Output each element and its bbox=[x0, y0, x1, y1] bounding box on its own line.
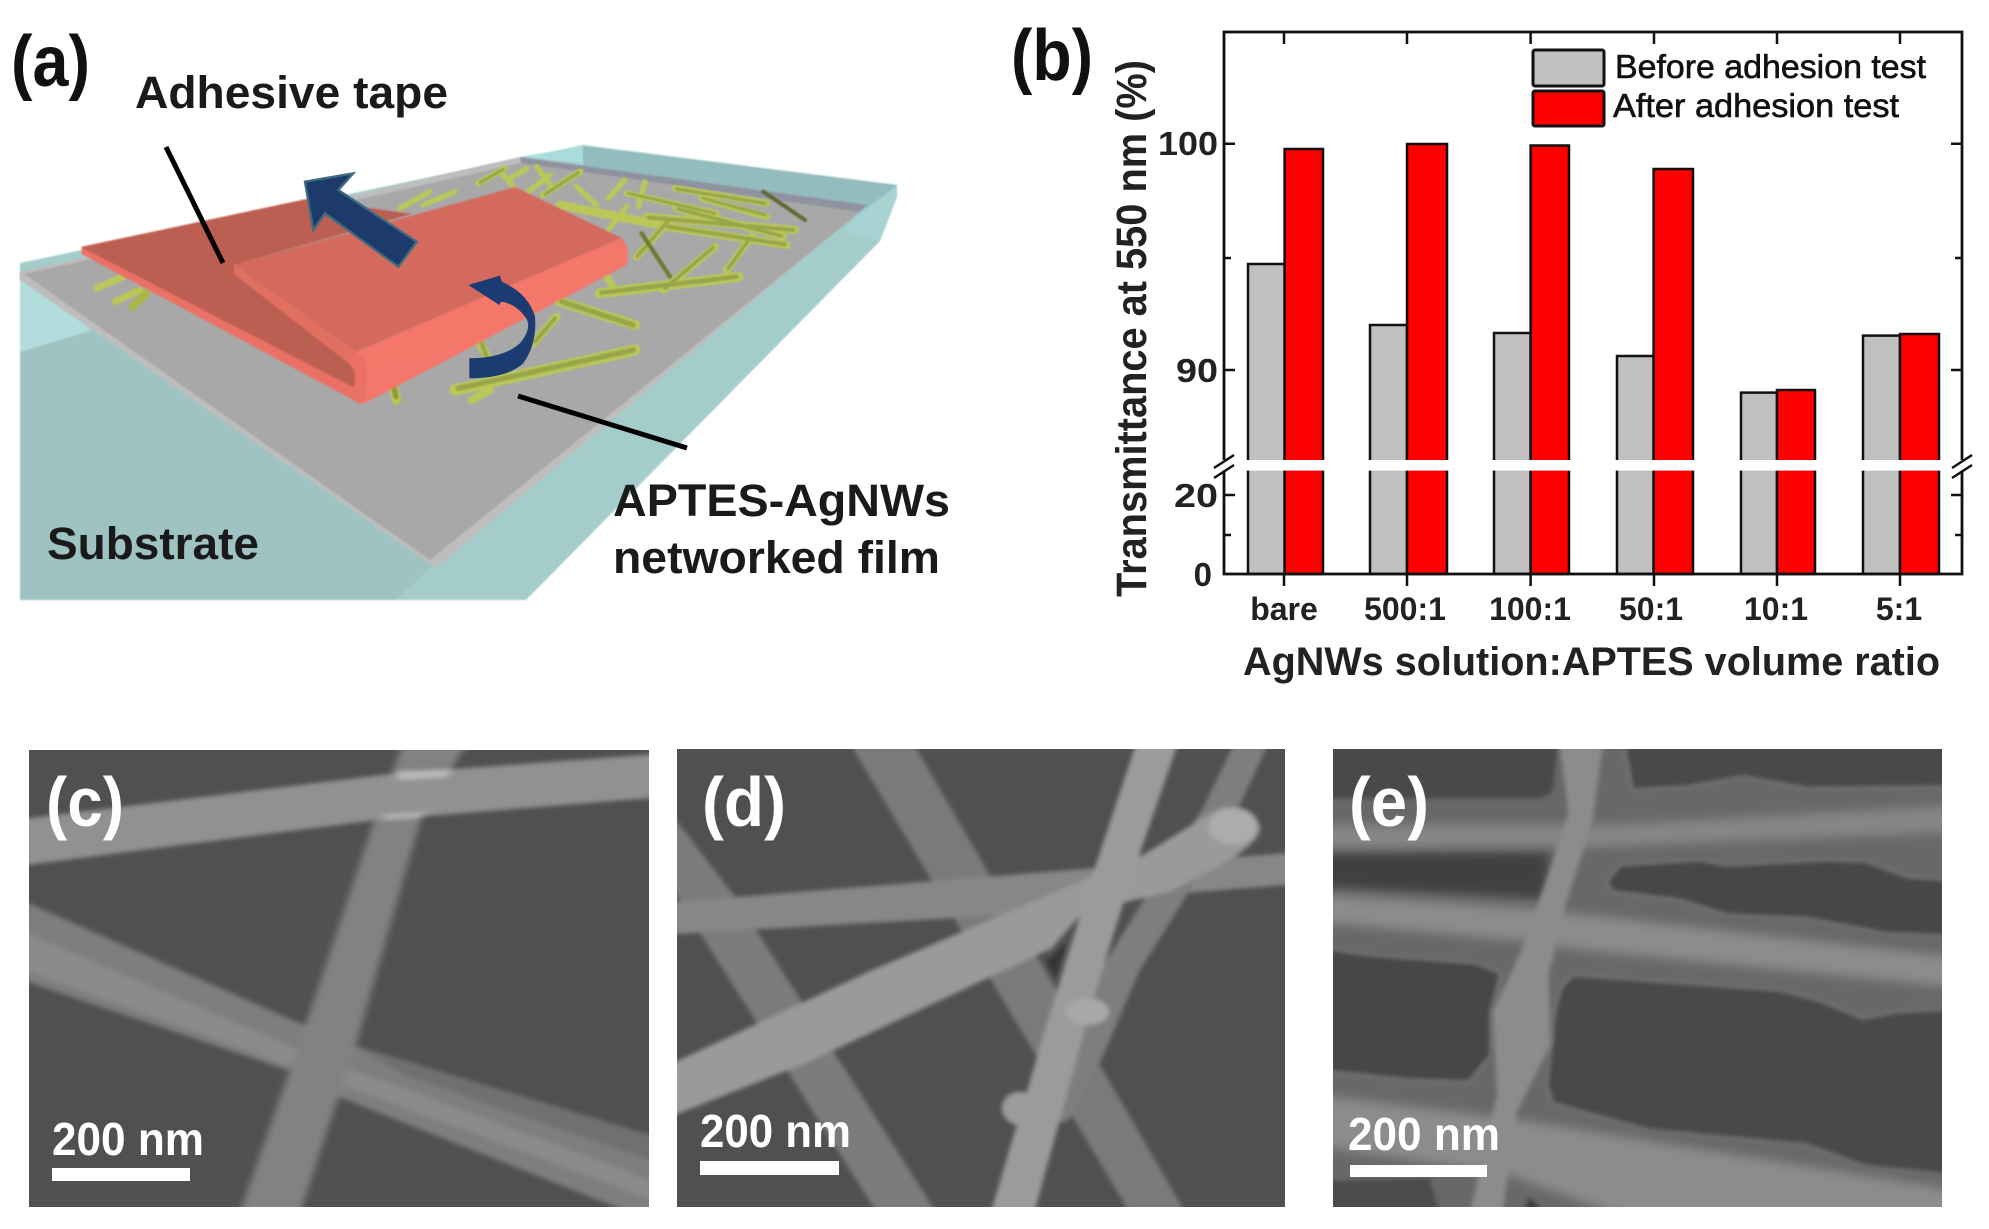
legend bbox=[1533, 48, 1926, 126]
scale label c: 200 nm bbox=[52, 1113, 204, 1165]
y tick labels: 0 bbox=[1194, 556, 1212, 593]
x tick labels: 10:1 bbox=[1744, 591, 1808, 627]
bars 5:1 bbox=[1863, 334, 1939, 574]
tape bbox=[82, 187, 628, 404]
legend: Before adhesion test bbox=[1615, 48, 1926, 85]
vertical nanowire e bbox=[1467, 735, 1604, 1225]
leader line: film bbox=[518, 396, 687, 448]
label (b): (b) bbox=[1011, 16, 1093, 96]
label (e): (e) bbox=[1349, 763, 1429, 841]
axes frame bbox=[1224, 32, 1962, 574]
panel d: SEM image bbox=[677, 749, 1285, 1207]
panel e: SEM image bbox=[1333, 749, 1942, 1207]
substrate slab bbox=[20, 145, 897, 600]
label film: APTES-AgNWs bbox=[613, 475, 950, 526]
y tick labels bbox=[1158, 125, 1218, 593]
tick marks bbox=[1224, 32, 1962, 586]
y axis title: Transmittance at 550 nm (%) bbox=[1108, 60, 1156, 597]
y tick labels: 90 bbox=[1176, 352, 1218, 389]
scale bar d bbox=[700, 1161, 839, 1175]
x tick labels: 500:1 bbox=[1364, 591, 1446, 627]
x tick labels: 50:1 bbox=[1619, 591, 1683, 627]
label (a): (a) bbox=[11, 22, 90, 102]
x axis title: AgNWs solution:APTES volume ratio bbox=[1243, 640, 1940, 684]
x tick labels bbox=[1250, 591, 1922, 627]
bars 100:1 bbox=[1494, 146, 1569, 574]
panel b: transmittance bar chart bbox=[1011, 16, 1974, 684]
label film: networked film bbox=[613, 532, 940, 583]
arrow: peel direction straight bbox=[305, 173, 417, 267]
axis break band bbox=[1212, 455, 1974, 478]
nanowires c bbox=[29, 750, 649, 1207]
scale label e: 200 nm bbox=[1348, 1108, 1500, 1160]
nanowires d bbox=[677, 749, 1285, 1207]
arrow: peel direction curved bbox=[468, 276, 535, 378]
bars bare bbox=[1248, 149, 1323, 574]
scale bar e bbox=[1350, 1165, 1487, 1177]
x tick labels: bare bbox=[1250, 591, 1318, 627]
merged film bands e bbox=[1333, 803, 1942, 1207]
nanowires far field bbox=[400, 167, 805, 400]
label film bbox=[613, 475, 950, 583]
y tick labels: 20 bbox=[1174, 477, 1218, 514]
bars 50:1 bbox=[1617, 169, 1693, 574]
silver film on substrate bbox=[20, 157, 867, 568]
bars bbox=[1248, 144, 1939, 574]
scale label d: 200 nm bbox=[700, 1105, 851, 1157]
nanowires under tape left bbox=[97, 277, 397, 400]
x tick labels: 5:1 bbox=[1876, 591, 1922, 627]
label (c): (c) bbox=[46, 763, 124, 841]
scale bar c bbox=[52, 1168, 190, 1181]
panel c: SEM image bbox=[29, 750, 649, 1207]
y tick labels: 100 bbox=[1158, 125, 1218, 162]
holes in film e bbox=[1333, 749, 1942, 1207]
leader line: adhesive tape bbox=[166, 147, 223, 263]
label substrate: Substrate bbox=[47, 518, 259, 569]
legend: After adhesion test bbox=[1613, 87, 1899, 124]
panel a: adhesive tape schematic bbox=[11, 22, 950, 600]
x tick labels: 100:1 bbox=[1489, 591, 1571, 627]
bars 500:1 bbox=[1370, 144, 1447, 574]
label (d): (d) bbox=[702, 763, 786, 841]
label adhesive tape: Adhesive tape bbox=[135, 67, 448, 118]
bars 10:1 bbox=[1741, 390, 1815, 574]
